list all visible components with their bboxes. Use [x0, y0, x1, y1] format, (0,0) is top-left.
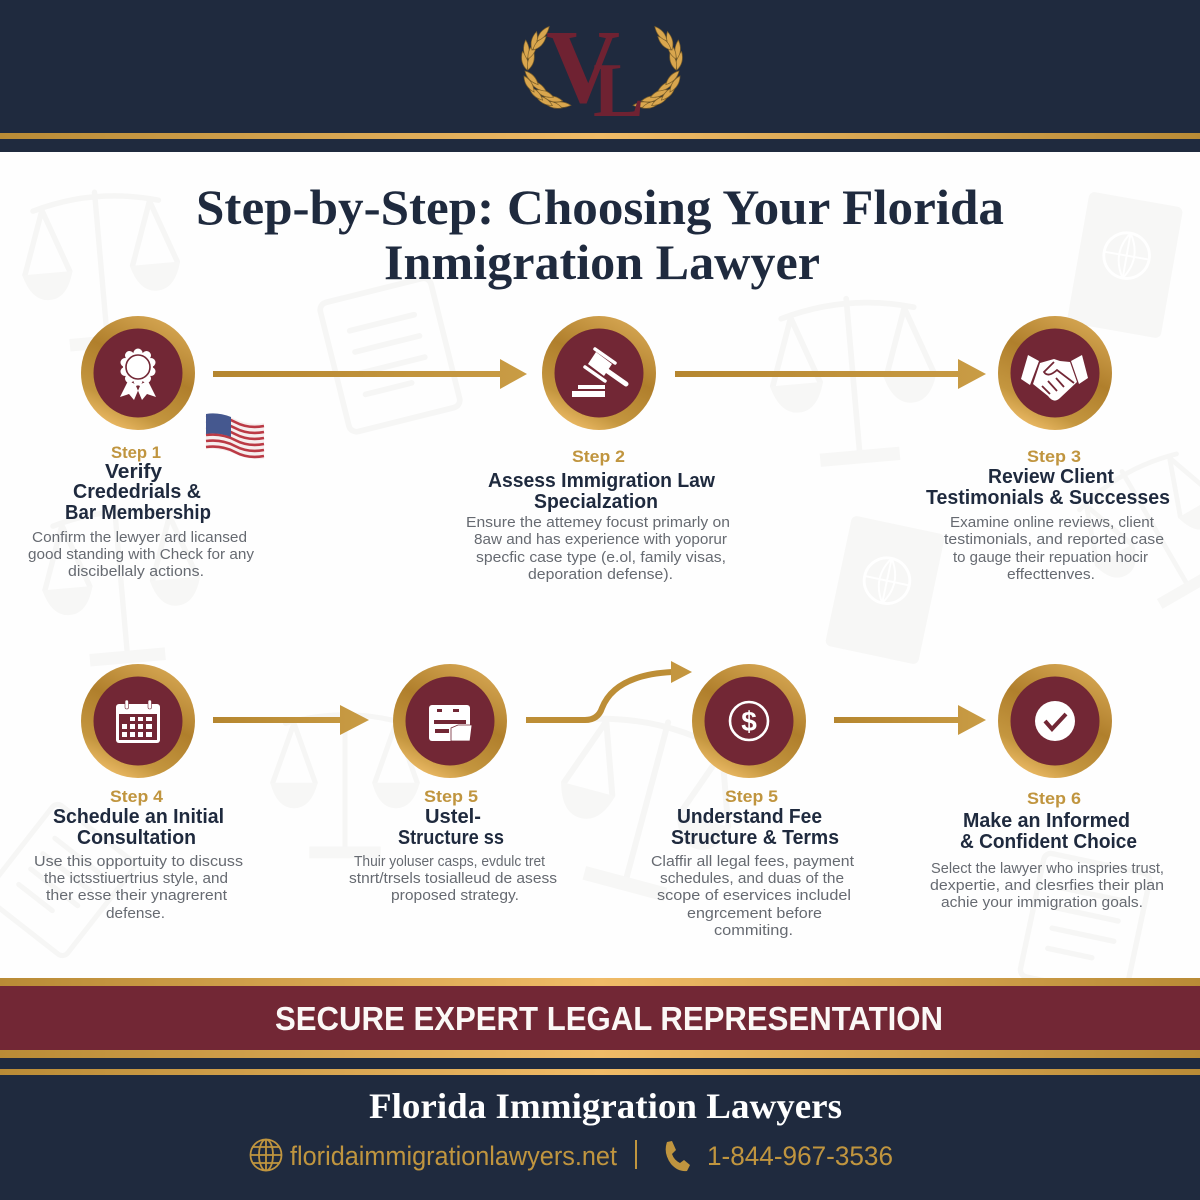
heading: Make an Informed — [963, 810, 1130, 832]
description: ther esse their ynagrerent — [46, 887, 228, 904]
description — [349, 853, 557, 904]
heading — [926, 466, 1170, 509]
description: scope of eservices includel — [657, 887, 851, 904]
description: 8aw and has experience with yoporur — [474, 531, 727, 548]
heading — [398, 806, 504, 849]
description: effecttenves. — [1007, 566, 1095, 583]
heading: Structure & Terms — [671, 827, 839, 849]
description: stnrt/trsels tosialleud de asess — [349, 870, 557, 887]
footer band — [0, 1058, 1200, 1200]
heading — [488, 470, 715, 513]
divider — [635, 1140, 637, 1169]
arrow: step 1 to step 2 — [213, 359, 527, 389]
icon: dollar coin: $ — [741, 706, 757, 737]
description: Claffir all legal fees, payment — [651, 853, 855, 870]
description: good standing with Check for any — [28, 546, 254, 563]
panel: step 3 — [926, 316, 1170, 583]
description: the ictsstiuertrius style, and — [44, 870, 228, 887]
icon: globe — [250, 1140, 282, 1170]
heading: Understand Fee — [677, 806, 822, 828]
icon: dollar coin — [692, 664, 806, 778]
laurel left — [520, 25, 571, 110]
call-to-action banner — [0, 978, 1200, 1058]
step label: Step 1 — [111, 443, 161, 462]
description: commiting. — [714, 922, 793, 939]
header band — [0, 0, 1200, 152]
logo: VL monogram with laurel — [520, 8, 684, 133]
laurel right — [633, 25, 684, 110]
heading: Ustel- — [425, 806, 481, 828]
description: proposed strategy. — [391, 887, 519, 904]
description: discibellaly actions. — [68, 563, 204, 580]
panel: step 5 fees — [651, 664, 855, 939]
heading: Review Client — [988, 466, 1114, 488]
heading: Testimonials & Successes — [926, 487, 1170, 509]
call-to-action banner: SECURE EXPERT LEGAL REPRESENTATION — [275, 1000, 943, 1037]
description: achie your immigration goals. — [941, 894, 1143, 911]
description: defense. — [106, 905, 165, 922]
icon: American flag — [206, 413, 264, 459]
heading — [65, 461, 211, 524]
arrow: step 2 to step 3 — [675, 359, 986, 389]
description — [28, 529, 254, 580]
description: Thuir yoluser casps, evdulc tret — [354, 853, 546, 870]
step label: Step 5 — [424, 787, 478, 806]
heading: & Confident Choice — [960, 831, 1137, 853]
icon: rosette badge — [81, 316, 195, 430]
description: Confirm the lewyer ard licansed — [32, 529, 247, 546]
footer firm name: Florida Immigration Lawyers — [369, 1086, 842, 1126]
heading: Schedule an Initial — [53, 806, 224, 828]
step label: Step 4 — [110, 787, 164, 806]
description: to gauge their repuation hocir — [953, 549, 1148, 566]
step label: Step 2 — [572, 447, 625, 466]
title — [196, 179, 1004, 290]
panel: step 1 — [28, 316, 254, 580]
heading: Verify — [105, 461, 163, 483]
heading: Consultation — [77, 827, 196, 849]
heading — [53, 806, 224, 849]
heading: Bar Membership — [65, 502, 211, 524]
heading: Crededrials & — [73, 481, 201, 503]
description: dexpertie, and clesrfies their plan — [930, 877, 1164, 894]
description: testimonials, and reported case — [944, 531, 1164, 548]
description — [944, 514, 1164, 583]
description — [651, 853, 855, 939]
icon: handshake — [998, 316, 1112, 430]
icon: phone — [666, 1141, 690, 1171]
icon: gavel — [542, 316, 656, 430]
title: Step-by-Step: Choosing Your Florida — [196, 179, 1004, 235]
heading: Structure ss — [398, 827, 504, 849]
step label: Step 3 — [1027, 447, 1081, 466]
description: schedules, and duas of the — [660, 870, 844, 887]
monogram L: L — [593, 47, 644, 133]
description — [34, 853, 243, 922]
description: Select the lawyer who inspries trust, — [931, 860, 1164, 877]
description — [930, 860, 1164, 911]
panel: step 4 — [34, 664, 243, 922]
description: Use this opportuity to discuss — [34, 853, 243, 870]
icon: check mark — [998, 664, 1112, 778]
arrow: curved step 5 to step 5b — [526, 661, 692, 720]
arrow: step 4 to step 5 — [213, 705, 369, 735]
heading — [671, 806, 839, 849]
phone number: 1-844-967-3536 — [707, 1141, 893, 1171]
title: Inmigration Lawyer — [384, 234, 820, 290]
description: deporation defense). — [528, 566, 673, 583]
icon: calendar — [81, 664, 195, 778]
monogram V: V — [546, 8, 620, 125]
background watermark icons — [0, 185, 1200, 998]
heading — [960, 810, 1137, 853]
step label: Step 6 — [1027, 789, 1081, 808]
description: engrcement before — [687, 905, 822, 922]
heading: Assess Immigration Law — [488, 470, 715, 492]
panel: step 2 — [466, 316, 730, 583]
description: Examine online reviews, client — [950, 514, 1155, 531]
panel: step 5 — [349, 664, 557, 904]
panel: step 6 — [930, 664, 1164, 911]
icon: document folder — [393, 664, 507, 778]
arrow: step 5b to step 6 — [834, 705, 986, 735]
description: Ensure the attemey focust primarly on — [466, 514, 730, 531]
description: specfic case type (e.ol, family visas, — [476, 549, 726, 566]
step label: Step 5 — [725, 787, 778, 806]
website: floridaimmigrationlawyers.net — [290, 1141, 617, 1171]
description — [466, 514, 730, 583]
heading: Specialzation — [534, 491, 658, 513]
